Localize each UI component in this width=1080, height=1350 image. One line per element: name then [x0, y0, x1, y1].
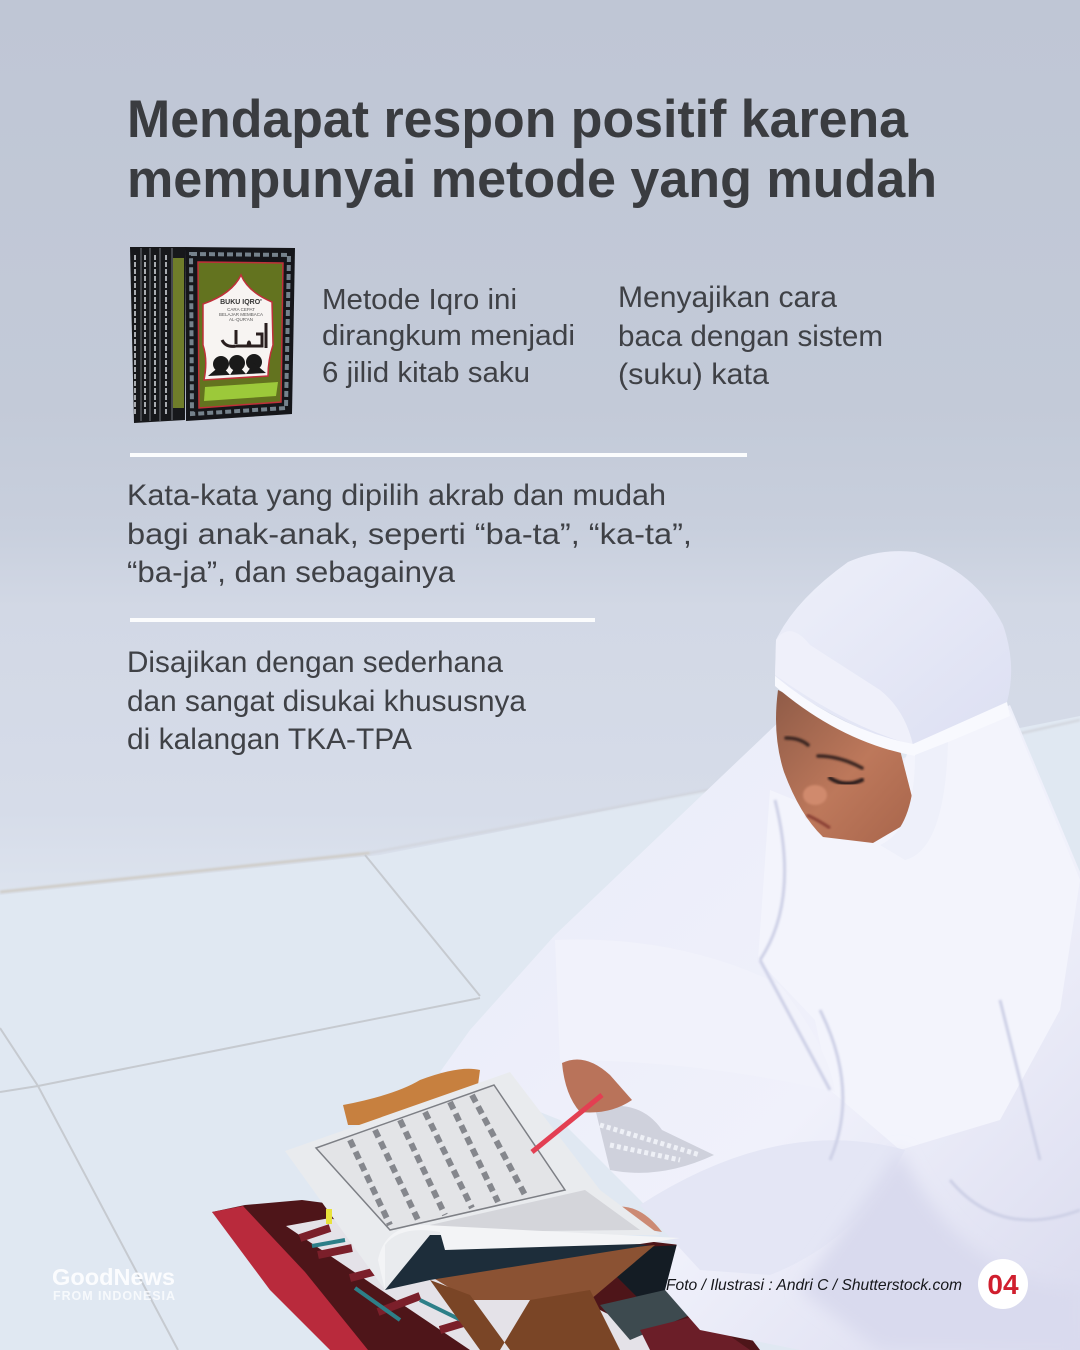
- photo: child's hands: [562, 1059, 662, 1232]
- text block: familiar words: bagi anak-anak, seperti “ba-ta”, “ka-ta”,: [127, 518, 692, 551]
- icon: Iqro book set: BUKU IQRO': [220, 299, 262, 306]
- photo: book stand: [343, 1069, 655, 1350]
- photo credit: Foto / Ilustrasi : Andri C / Shutterstock.com: [666, 1277, 962, 1294]
- text block: simple presentation: Disajikan dengan sederhana: [127, 646, 503, 679]
- logo: GoodNews from Indonesia: GoodNews: [52, 1264, 175, 1290]
- text block: syllable system: Menyajikan cara: [618, 281, 837, 314]
- icon: Iqro book set: AL-QUR'AN: [229, 317, 253, 322]
- text block: familiar words: [127, 479, 692, 589]
- text block: familiar words: “ba-ja”, dan sebagainya: [127, 556, 455, 589]
- text block: simple presentation: dan sangat disukai khususnya: [127, 685, 526, 718]
- page number badge: 04: [987, 1269, 1019, 1300]
- photo: child's head and face: [775, 551, 1011, 860]
- photo: prayer rug: [212, 1200, 760, 1350]
- text block: six volumes: dirangkum menjadi: [322, 320, 575, 352]
- page number badge: [978, 1259, 1028, 1309]
- title: [127, 90, 937, 209]
- photo: child in white prayer robe: [440, 705, 1080, 1350]
- title: mempunyai metode yang mudah: [127, 150, 937, 209]
- text block: simple presentation: di kalangan TKA-TPA: [127, 723, 412, 756]
- photo: open Quran: [285, 1072, 680, 1290]
- text block: simple presentation: [127, 646, 526, 756]
- icon: Iqro book set: [130, 247, 295, 423]
- text block: six volumes: [322, 284, 575, 389]
- text block: syllable system: baca dengan sistem: [618, 320, 883, 353]
- icon: Iqro book set: BELAJAR MEMBACA: [219, 312, 263, 317]
- divider line 1: [130, 453, 747, 457]
- icon: Iqro book set: CARA CEPAT: [227, 307, 255, 312]
- logo: GoodNews from Indonesia: [52, 1264, 175, 1303]
- text block: six volumes: Metode Iqro ini: [322, 284, 517, 316]
- text block: syllable system: (suku) kata: [618, 358, 769, 391]
- text block: familiar words: Kata-kata yang dipilih akrab dan mudah: [127, 479, 666, 512]
- text block: six volumes: 6 jilid kitab saku: [322, 357, 530, 389]
- text block: syllable system: [618, 281, 883, 391]
- title: Mendapat respon positif karena: [127, 90, 909, 149]
- logo: GoodNews from Indonesia: FROM INDONESIA: [53, 1289, 175, 1303]
- divider line 2: [130, 618, 595, 622]
